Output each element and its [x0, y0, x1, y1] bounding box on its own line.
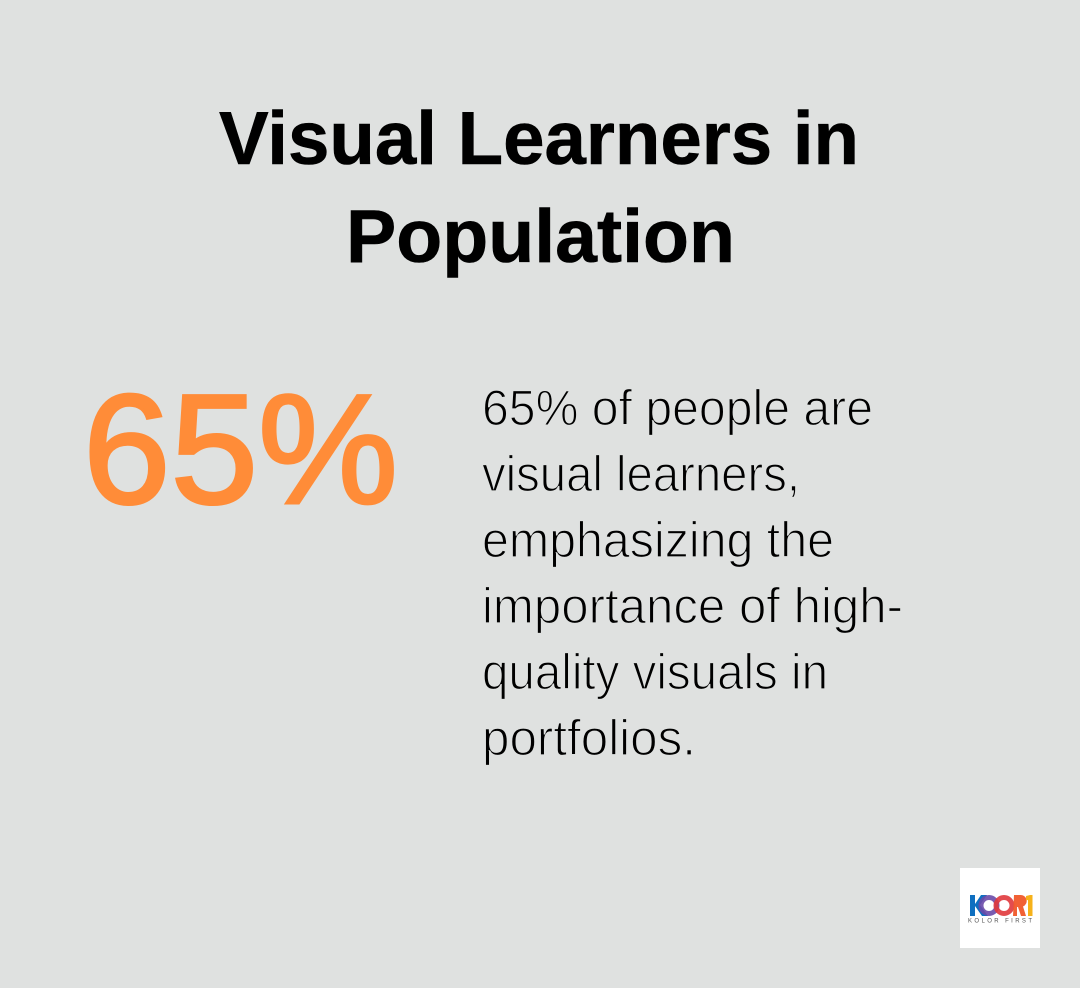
title: Population: [346, 194, 735, 278]
description text: emphasizing the: [482, 512, 834, 568]
description text: visual learners,: [482, 446, 800, 502]
description text: importance of high-: [482, 578, 903, 634]
logo letter R: [1013, 895, 1027, 916]
description text: portfolios.: [482, 710, 696, 766]
logo letter K: [970, 895, 988, 916]
title: [219, 96, 859, 278]
logo: Koor1 Kolor First: [960, 868, 1040, 948]
big stat: 65%: 65%: [83, 363, 398, 537]
title: Visual Learners in: [219, 96, 859, 180]
description text: [482, 380, 903, 766]
logo numeral 1: [1026, 895, 1032, 916]
logo tagline: KOLOR FIRST: [968, 918, 1032, 924]
description text: quality visuals in: [482, 644, 828, 700]
description text: 65% of people are: [482, 380, 873, 436]
logo letters O O: [981, 898, 1012, 914]
